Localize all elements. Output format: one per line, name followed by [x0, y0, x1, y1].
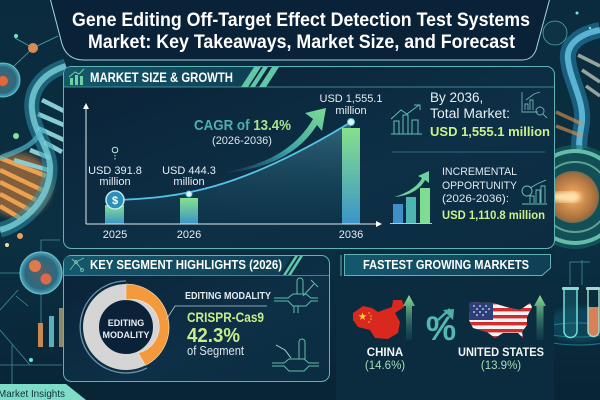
header text: KEY SEGMENT HIGHLIGHTS (2026) — [90, 257, 282, 272]
China label — [365, 347, 405, 372]
panel header — [341, 254, 550, 276]
China label: CHINA — [367, 347, 403, 359]
icon: rising bars — [390, 171, 432, 224]
panel header — [64, 67, 554, 87]
title text: Gene Editing Off-Target Effect Detection Test Systems — [72, 9, 530, 31]
donut chart: editing modality: MODALITY — [102, 330, 150, 340]
year labels: 2025 — [103, 229, 127, 241]
segment callout: CRISPR-Cas9 — [187, 309, 264, 325]
donut chart: editing modality — [80, 281, 169, 373]
icon: molecule — [70, 258, 84, 272]
right glowing orb with rings — [523, 145, 600, 249]
panel header — [64, 256, 329, 276]
icon: percent with arrow: % — [426, 310, 456, 348]
panel: market size and growth — [64, 66, 554, 248]
value labels: USD 1,555.1 — [320, 93, 382, 105]
icon: USA flag map — [469, 302, 532, 338]
arrow: CAGR — [222, 108, 326, 173]
segment callout — [185, 291, 271, 358]
incremental opportunity callout — [390, 166, 547, 224]
CAGR label: CAGR of 13.4% — [194, 117, 291, 134]
icon: pin above 2025 — [112, 147, 118, 161]
icon: dollar coin — [106, 191, 124, 209]
title banner — [50, 0, 567, 60]
value labels: million — [99, 176, 131, 188]
China label: (14.6%) — [365, 360, 405, 372]
icon: dollar coin: $ — [112, 195, 118, 207]
arrow: China growth — [403, 295, 415, 340]
segment callout: of Segment — [187, 344, 244, 358]
icon: chart with magnifier — [522, 92, 547, 118]
value labels: million — [173, 176, 205, 188]
value labels: million — [335, 105, 367, 117]
icon: gene editing scissors bottom — [272, 339, 319, 371]
incremental opportunity callout: INCREMENTAL — [442, 166, 517, 178]
donut chart: editing modality: EDITING — [108, 318, 144, 328]
left cells and circuit lines — [0, 34, 63, 400]
total market callout: USD 1,555.1 million — [430, 124, 550, 139]
United States label: (13.9%) — [481, 360, 521, 372]
incremental opportunity callout: OPPORTUNITY — [442, 180, 518, 192]
icon: China map — [353, 300, 404, 339]
icon: gene editing scissors top — [274, 278, 318, 313]
total market callout: Total Market: — [430, 106, 510, 121]
total market callout: By 2036, — [430, 90, 483, 105]
incremental opportunity callout: USD 1,110.8 million — [442, 210, 545, 222]
bar chart: market size — [83, 93, 382, 241]
panel: key segment highlights — [64, 256, 330, 382]
icon: dollar chart — [522, 180, 547, 204]
CAGR label: (2026-2036) — [212, 135, 272, 147]
incremental opportunity callout: (2026-2036): — [442, 193, 509, 205]
header text: MARKET SIZE & GROWTH — [90, 70, 233, 85]
segment callout: 42.3% — [187, 325, 240, 347]
title text: Market: Key Takeaways, Market Size, and Forecast — [88, 31, 515, 53]
icon: header growth chart — [69, 69, 84, 85]
year labels: 2026 — [177, 229, 201, 241]
right DNA helix — [556, 12, 600, 150]
value labels: USD 391.8 — [88, 165, 142, 177]
panel: fastest growing markets — [336, 250, 554, 400]
year labels: 2036 — [339, 229, 363, 241]
leader line — [166, 306, 267, 320]
panel header: FASTEST GROWING MARKETS — [363, 258, 529, 272]
United States label: UNITED STATES — [458, 347, 544, 359]
right test tubes — [534, 260, 600, 345]
segment callout: EDITING MODALITY — [185, 291, 271, 302]
CAGR label — [194, 117, 291, 147]
title text — [72, 9, 530, 53]
value labels — [88, 93, 382, 188]
footer tab — [0, 384, 86, 400]
footer tab: Market Insights — [0, 388, 65, 400]
arrow: USA growth — [534, 295, 546, 340]
year labels — [103, 229, 363, 241]
value labels: USD 444.3 — [162, 165, 216, 177]
total market callout — [391, 90, 550, 139]
left DNA helix — [0, 66, 66, 230]
United States label — [458, 347, 544, 372]
banner icon — [543, 21, 567, 45]
icon: line chart — [391, 105, 422, 134]
